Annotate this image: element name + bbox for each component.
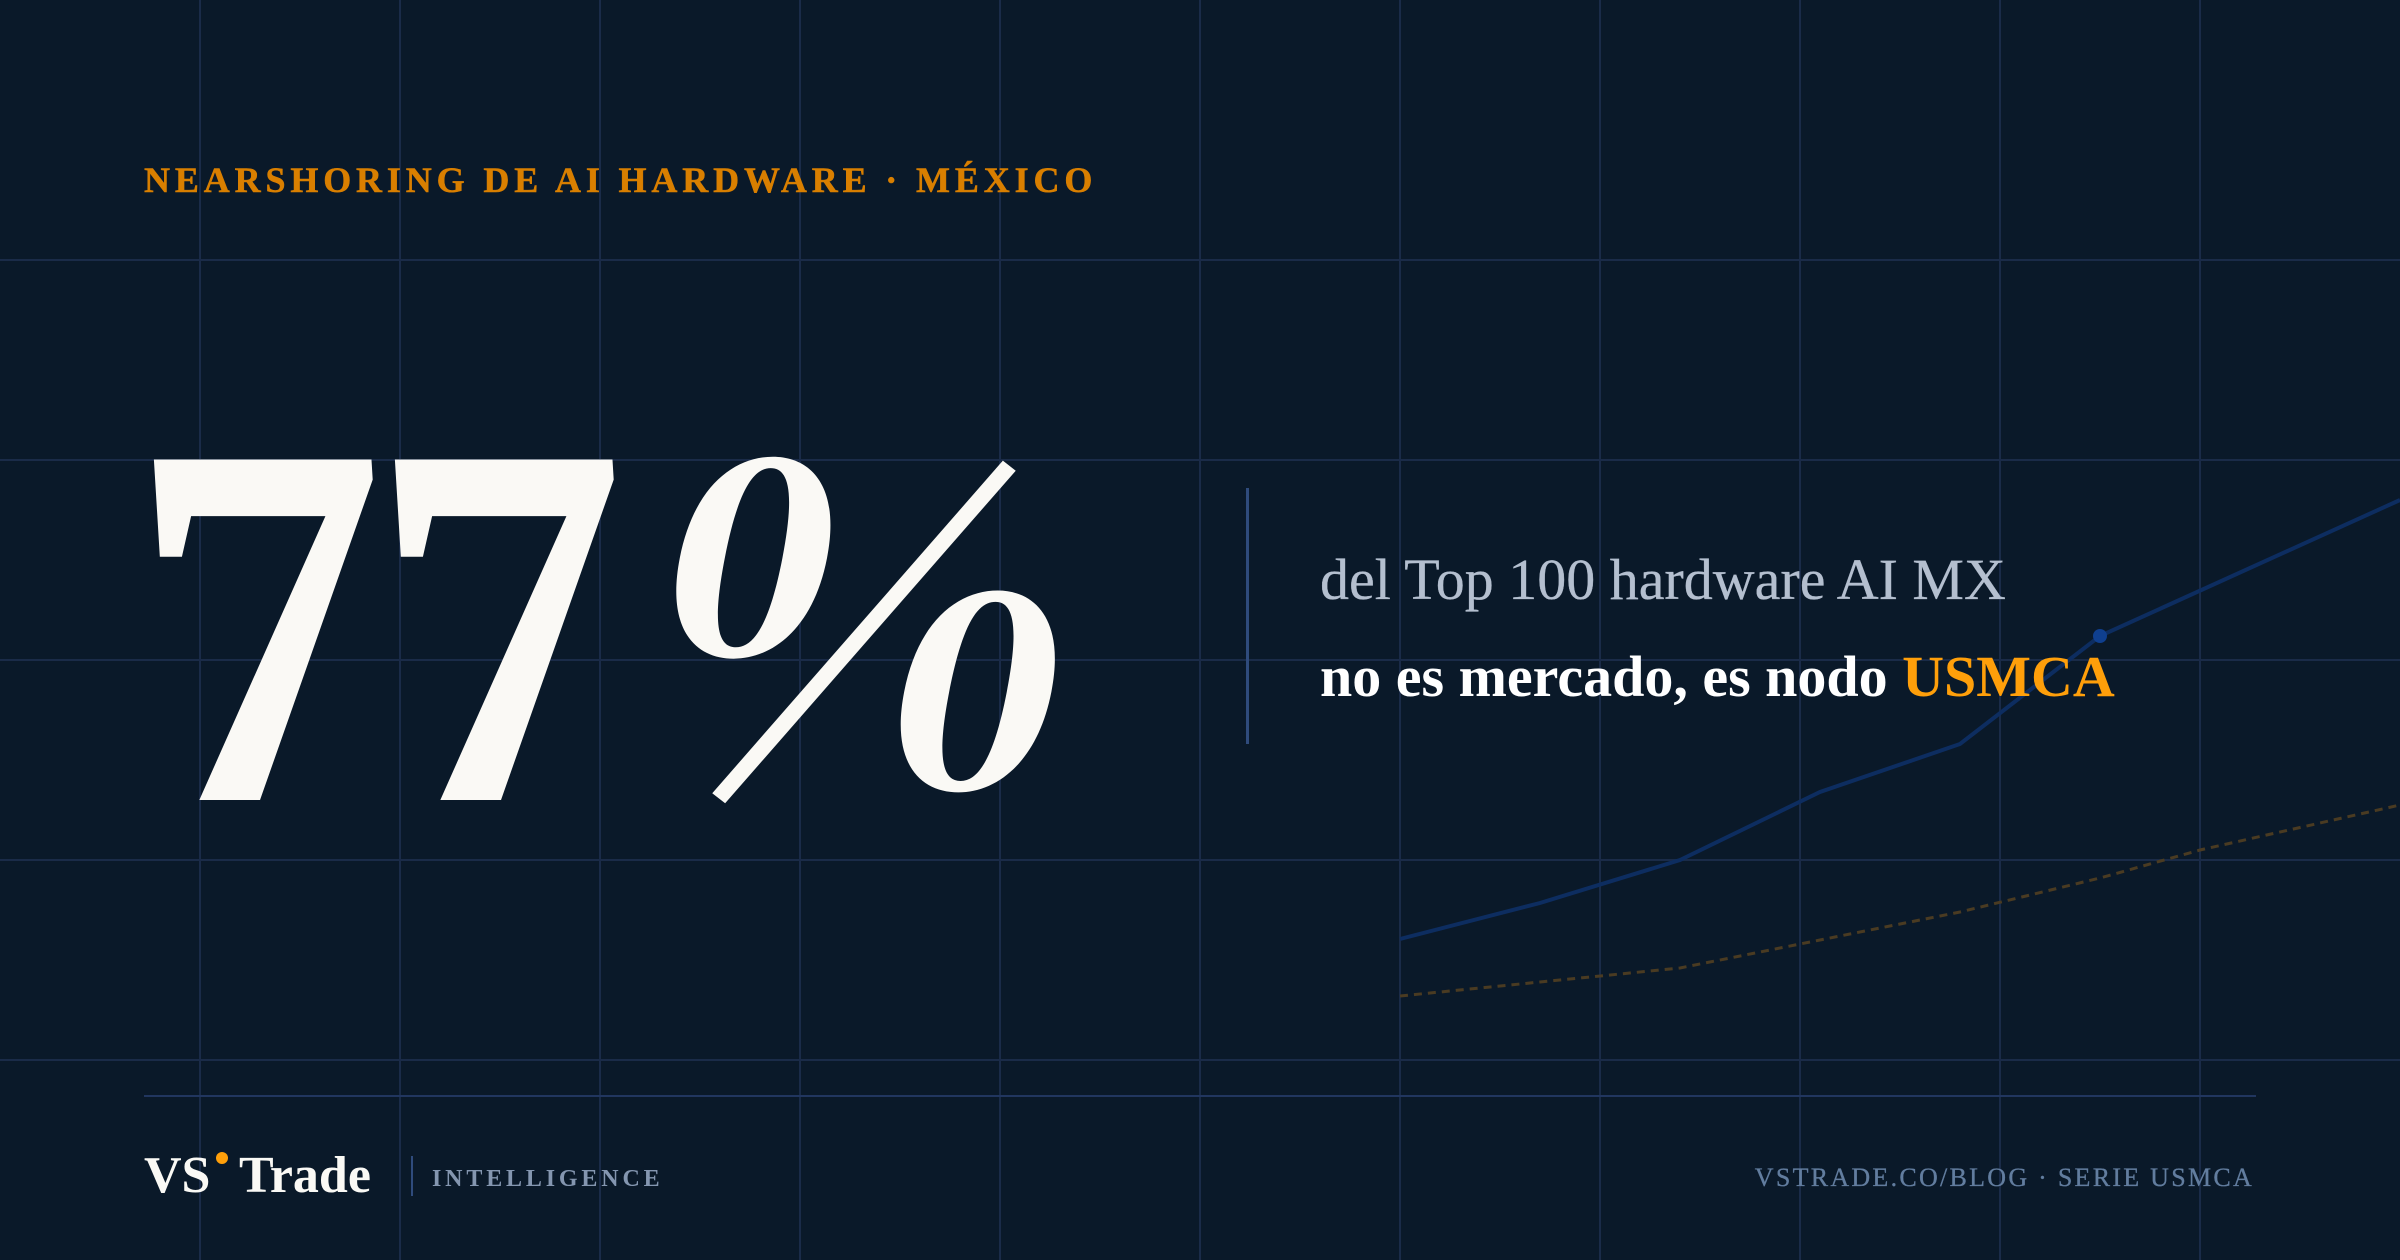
description text [1320, 547, 2115, 709]
brand accent dot [216, 1152, 228, 1164]
chart line: blue trend [1400, 500, 2400, 939]
brand logo: VS Trade [144, 1147, 371, 1204]
vertical divider [1246, 488, 1249, 744]
brand tag: INTELLIGENCE: INTELLIGENCE [432, 1166, 663, 1192]
chart marker: blue dot [2093, 629, 2107, 643]
footer source text: VSTRADE.CO/BLOG · SERIE USMCA [1755, 1163, 2254, 1192]
description line 2: no es mercado, es nodo USMCA [1320, 644, 2115, 709]
footer rule [144, 1095, 2256, 1097]
big percent sign: % [594, 286, 1147, 914]
line chart: background trend lines [1400, 500, 2400, 996]
chart line: dashed amber trend [1400, 805, 2400, 996]
big digits: 77: 77 [117, 336, 653, 913]
brand separator [411, 1156, 413, 1196]
brand text: Trade: Trade [239, 1147, 371, 1204]
eyebrow heading: NEARSHORING DE AI HARDWARE · MÉXICO [144, 160, 1097, 200]
big number: 77% [117, 286, 1147, 914]
description line 1: del Top 100 hardware AI MX [1320, 547, 2006, 612]
brand text: VS: VS [144, 1147, 210, 1204]
